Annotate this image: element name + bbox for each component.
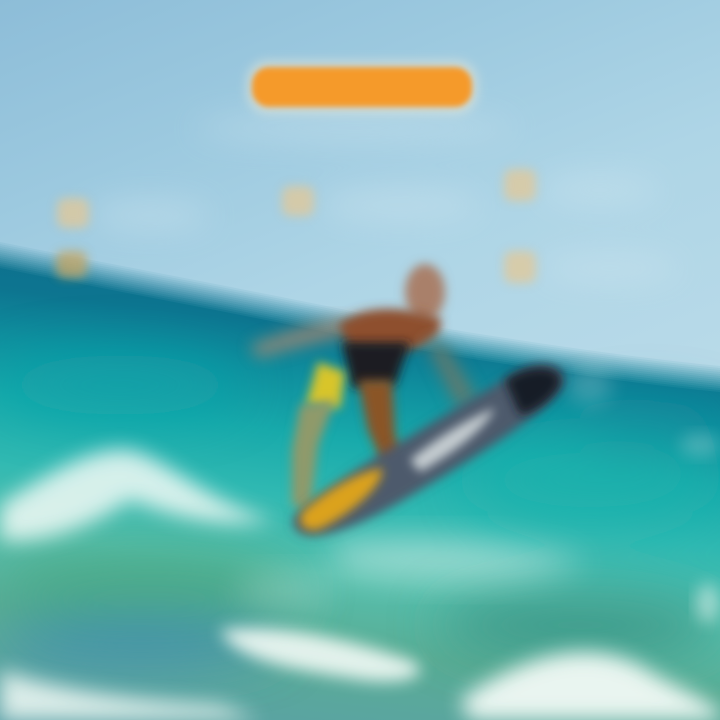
pale orange markers bbox=[56, 169, 536, 283]
front leg bbox=[292, 400, 335, 510]
surfboard bbox=[293, 364, 564, 536]
faint cloud bands bbox=[90, 115, 680, 282]
yellow shorts panel bbox=[306, 362, 345, 408]
marker: right lower bbox=[504, 251, 536, 283]
surfer figure bbox=[250, 264, 478, 510]
orange title pill bbox=[246, 60, 478, 114]
back leg bbox=[358, 380, 408, 470]
marker: right upper bbox=[504, 169, 536, 201]
marker: center bbox=[282, 186, 314, 216]
torso bbox=[338, 309, 441, 352]
turquoise water patches bbox=[0, 355, 720, 660]
white foam waves bbox=[0, 365, 720, 720]
head bbox=[405, 264, 445, 320]
sea with soft horizon bbox=[0, 242, 720, 720]
right arm bbox=[425, 340, 478, 408]
black shorts bbox=[342, 342, 410, 388]
marker: left lower bbox=[56, 251, 87, 278]
outstretched arm bbox=[250, 318, 350, 358]
marker: left upper bbox=[57, 198, 89, 228]
